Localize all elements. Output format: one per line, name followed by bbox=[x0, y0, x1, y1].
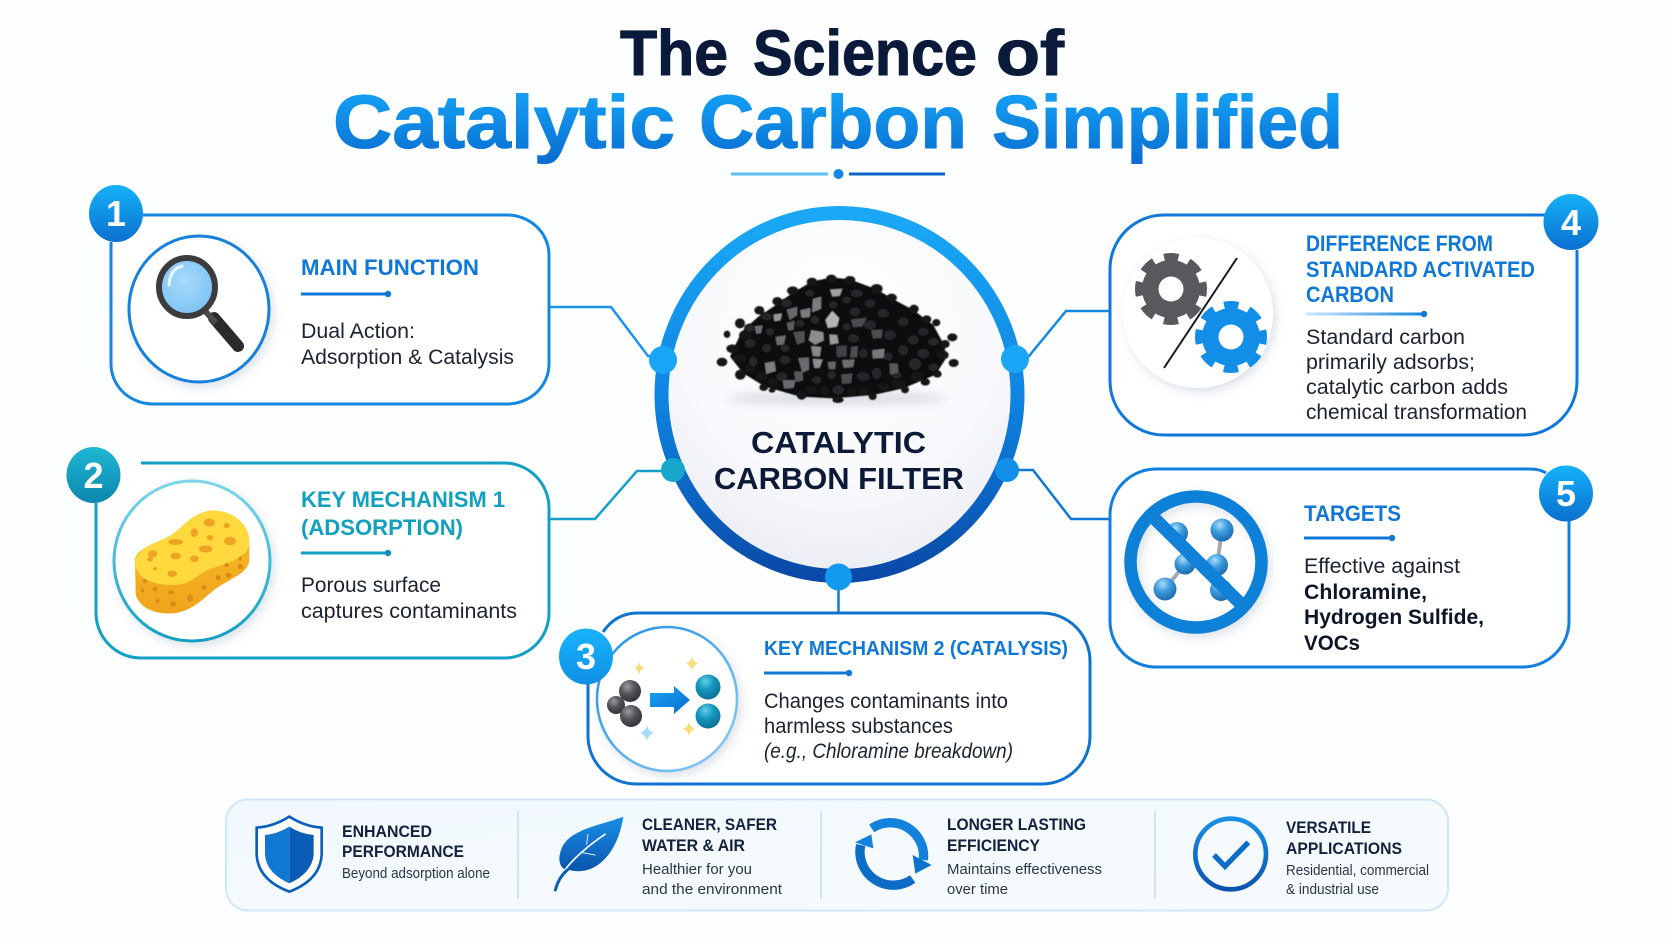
badge 2 bbox=[66, 447, 120, 503]
benefit 2 text: CLEANER, SAFER bbox=[642, 816, 777, 834]
connector: card 4 to hub bbox=[1018, 311, 1110, 356]
title: Catalytic bbox=[333, 80, 675, 164]
title divider bbox=[731, 169, 945, 179]
badge 1 bbox=[89, 185, 143, 242]
benefit 3 text: over time bbox=[947, 882, 1008, 898]
targets text bbox=[1304, 501, 1484, 655]
badge 4 bbox=[1544, 194, 1598, 250]
targets text: Effective against bbox=[1304, 555, 1460, 578]
benefit 3 text: Maintains effectiveness bbox=[947, 862, 1102, 878]
benefit 2 text: and the environment bbox=[642, 882, 782, 898]
panel 3: key mechanism 2 bbox=[559, 613, 1090, 784]
icon: sponge bbox=[114, 481, 270, 641]
key mechanism 2 text: Changes contaminants into bbox=[764, 690, 1008, 713]
icon: no molecules bbox=[1130, 496, 1262, 628]
difference text: CARBON bbox=[1306, 282, 1394, 307]
badge 4: 4 bbox=[1561, 202, 1581, 243]
panel 5: targets bbox=[1110, 466, 1593, 667]
benefit 4 text: & industrial use bbox=[1286, 882, 1379, 898]
badge 3 bbox=[559, 628, 613, 684]
hub label: CATALYTIC bbox=[751, 425, 926, 460]
key mechanism 2 text: harmless substances bbox=[764, 715, 953, 738]
main function text: MAIN FUNCTION bbox=[301, 255, 479, 280]
benefit 3 text: LONGER LASTING bbox=[947, 816, 1086, 834]
connector: card 2 to hub bbox=[549, 471, 670, 519]
key mechanism 1 text: captures contaminants bbox=[301, 600, 517, 623]
hub label: CARBON FILTER bbox=[714, 461, 964, 496]
key mechanism 1 text: (ADSORPTION) bbox=[301, 515, 463, 540]
panel: benefits bar bbox=[226, 800, 1448, 910]
icon: gears bbox=[1123, 238, 1273, 388]
key mechanism 2 text bbox=[764, 638, 1068, 763]
benefit 1 text: Beyond adsorption alone bbox=[342, 866, 490, 882]
benefit 2 text: WATER & AIR bbox=[642, 837, 745, 855]
main function text bbox=[301, 255, 514, 369]
icon: cycle arrows bbox=[855, 823, 932, 885]
difference text: catalytic carbon adds bbox=[1306, 376, 1508, 399]
badge 5 bbox=[1539, 466, 1593, 522]
connector: card 3 to hub bbox=[837, 580, 840, 613]
difference text: Standard carbon bbox=[1306, 326, 1465, 349]
benefit 2 text: Healthier for you bbox=[642, 862, 752, 878]
targets text: TARGETS bbox=[1304, 501, 1401, 526]
benefit 3 text: EFFICIENCY bbox=[947, 837, 1040, 855]
difference text: chemical transformation bbox=[1306, 401, 1527, 424]
benefit 1 text bbox=[342, 823, 490, 882]
main function text: Dual Action: bbox=[301, 320, 415, 343]
title bbox=[333, 17, 1343, 164]
panel 4: difference from standard activated carbon bbox=[1110, 194, 1598, 435]
badge 1: 1 bbox=[106, 193, 126, 234]
badge 2: 2 bbox=[83, 455, 104, 496]
targets text: Chloramine, bbox=[1304, 581, 1427, 604]
badge 3: 3 bbox=[576, 636, 596, 677]
difference text: DIFFERENCE FROM bbox=[1306, 231, 1493, 256]
benefit 1 text: ENHANCED bbox=[342, 823, 432, 841]
bright granule facets bbox=[755, 289, 898, 388]
icon: check circle bbox=[1195, 819, 1266, 889]
targets text: Hydrogen Sulfide, bbox=[1304, 606, 1484, 629]
connector: card 5 to hub bbox=[1010, 470, 1111, 519]
icon: catalytic reaction bbox=[597, 627, 737, 771]
title: Carbon bbox=[699, 80, 967, 164]
icon: magnifying glass bbox=[129, 236, 269, 382]
benefit 1 text: PERFORMANCE bbox=[342, 843, 464, 861]
icon: leaf bbox=[555, 817, 623, 890]
central hub: catalytic carbon filter bbox=[649, 213, 1029, 590]
connector: card 1 to hub bbox=[549, 307, 660, 356]
title: of bbox=[996, 17, 1065, 89]
benefit 4 text bbox=[1286, 819, 1429, 898]
targets text: VOCs bbox=[1304, 632, 1360, 655]
title: Simplified bbox=[992, 80, 1343, 164]
difference text: STANDARD ACTIVATED bbox=[1306, 257, 1535, 282]
key mechanism 1 text bbox=[301, 487, 517, 623]
benefit 4 text: APPLICATIONS bbox=[1286, 840, 1402, 858]
benefit 4 text: Residential, commercial bbox=[1286, 863, 1429, 879]
panel 2: key mechanism 1 bbox=[66, 447, 549, 658]
key mechanism 2 text: KEY MECHANISM 2 (CATALYSIS) bbox=[764, 638, 1068, 660]
hub label bbox=[714, 425, 964, 496]
title: Science bbox=[753, 17, 977, 89]
key mechanism 1 text: Porous surface bbox=[301, 574, 441, 597]
key mechanism 2 text: (e.g., Chloramine breakdown) bbox=[764, 740, 1013, 763]
difference text: primarily adsorbs; bbox=[1306, 351, 1475, 374]
benefit 2 text bbox=[642, 816, 782, 898]
panel 1: main function bbox=[89, 185, 549, 404]
body grains bbox=[744, 289, 939, 395]
benefit 3 text bbox=[947, 816, 1102, 898]
title: The bbox=[620, 17, 728, 89]
icon: shield bbox=[257, 817, 322, 892]
hub nodes bbox=[649, 345, 1029, 590]
benefit 4 text: VERSATILE bbox=[1286, 819, 1371, 837]
main function text: Adsorption & Catalysis bbox=[301, 346, 514, 369]
badge 5: 5 bbox=[1556, 473, 1576, 514]
difference text bbox=[1306, 231, 1535, 424]
outline grains bbox=[717, 275, 959, 403]
key mechanism 1 text: KEY MECHANISM 1 bbox=[301, 487, 505, 512]
icon: carbon granule pile bbox=[717, 275, 959, 406]
